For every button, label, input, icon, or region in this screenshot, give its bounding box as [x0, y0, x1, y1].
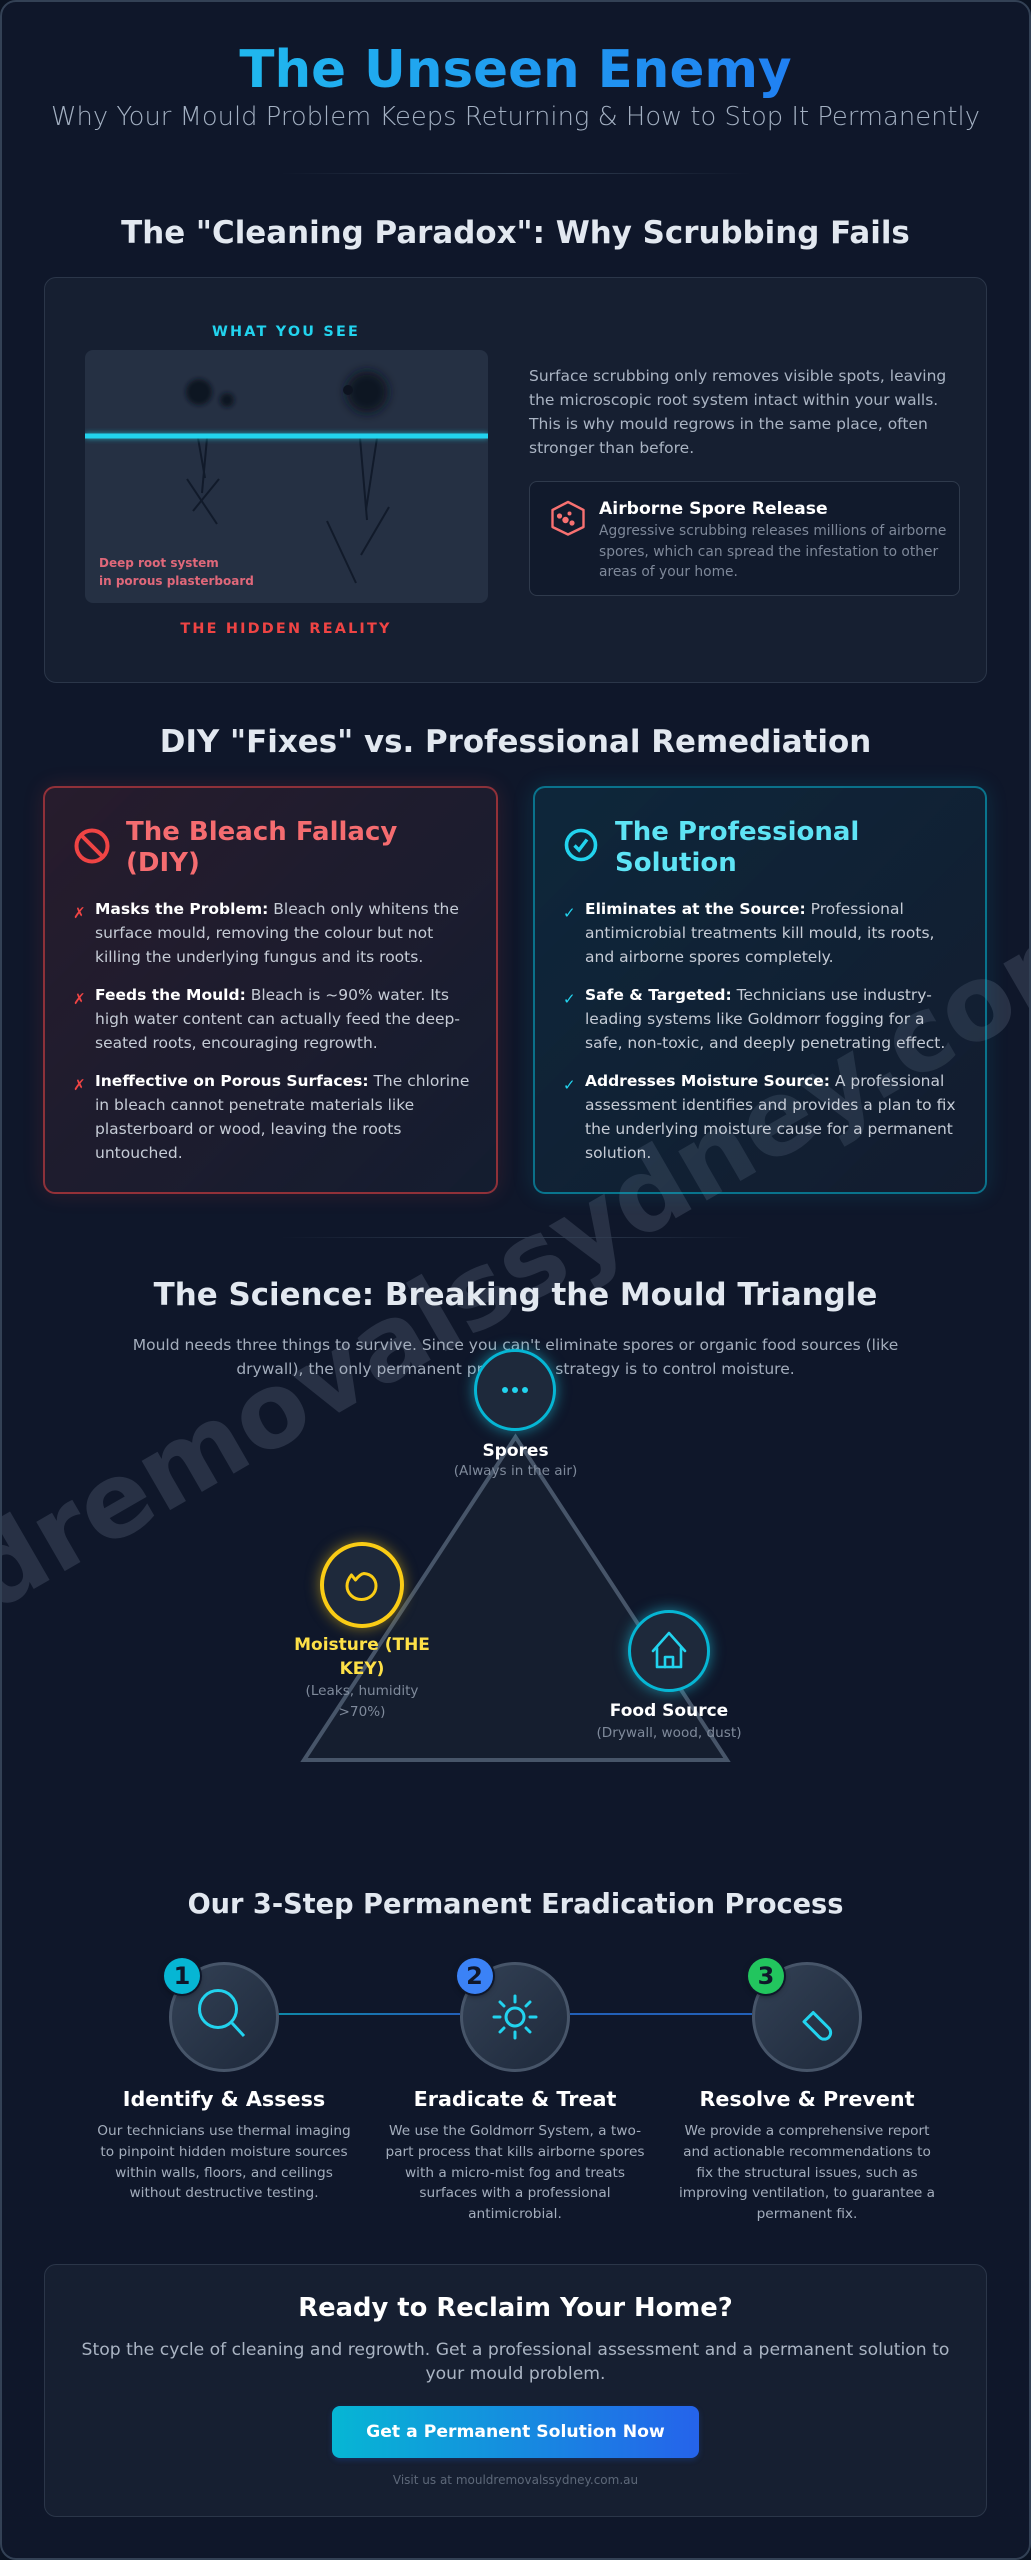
badge: [456, 1958, 492, 1994]
panel: bleach fallacy: [43, 786, 498, 1194]
diagram: mould triangle: [300, 1434, 730, 1762]
callout heading: Airborne Spore Release: [599, 499, 828, 519]
list item: surface mould, removing the colour but not: [95, 924, 433, 942]
node: food source: [596, 1601, 742, 1741]
step text: antimicrobial.: [468, 2206, 562, 2222]
step text: We use the Goldmorr System, a two-: [389, 2123, 641, 2139]
icon: spores hexagon: [551, 500, 585, 536]
step text: [97, 2123, 351, 2201]
marker: ✓: [563, 1076, 576, 1094]
marker: ✓: [563, 904, 576, 922]
triangle intro: [133, 1336, 898, 1378]
CTA button: Get a Permanent Solution Now: [366, 2422, 665, 2442]
marker: ✓: [563, 990, 576, 1008]
list item: high water content can actually feed the deep-: [95, 1010, 460, 1028]
icon: sun: [460, 1962, 570, 2072]
CTA text: your mould problem.: [426, 2364, 606, 2384]
badge: 2: [466, 1962, 483, 1990]
triangle intro: drywall), the only permanent prevention strategy is to control moisture.: [236, 1360, 795, 1378]
step text: Our technicians use thermal imaging: [97, 2123, 351, 2139]
step title: Identify & Assess: [123, 2087, 325, 2111]
panel: call to action: [44, 2264, 987, 2517]
list item: safe, non-toxic, and deeply penetrating effect.: [585, 1034, 945, 1052]
diagram caption: in porous plasterboard: [99, 574, 254, 588]
list item: the underlying moisture cause for a permanent: [585, 1120, 953, 1138]
subtitle: Why Your Mould Problem Keeps Returning & How to Stop It Permanently: [51, 102, 980, 132]
heading: 3-step process: Our 3-Step Permanent Eradication Process: [188, 1889, 843, 1920]
list item: solution.: [585, 1144, 651, 1162]
step text: improving ventilation, to guarantee a: [679, 2185, 935, 2201]
node label: Moisture (THE: [294, 1635, 430, 1655]
icon: check circle: [564, 828, 598, 862]
paradox explanation: [528, 367, 946, 457]
node: moisture: [294, 1533, 430, 1720]
badge: [748, 1958, 784, 1994]
panel: professional solution: [533, 786, 987, 1194]
step text: with a micro-mist fog and treats: [405, 2165, 625, 2181]
node detail: (Always in the air): [454, 1463, 577, 1479]
list item: [585, 900, 934, 966]
list item: Masks the Problem: Bleach only whitens the: [95, 900, 459, 918]
icon: moisture circle: [320, 1542, 404, 1628]
heading: cleaning paradox: The "Cleaning Paradox": Why Scrubbing Fails: [121, 215, 910, 251]
step title: Eradicate & Treat: [414, 2087, 616, 2111]
list item: [95, 1072, 469, 1162]
diagram caption: [99, 556, 254, 588]
CTA text: [82, 2340, 949, 2384]
list item: in bleach cannot penetrate materials like: [95, 1096, 414, 1114]
list item: leading systems like Goldmorr fogging for a: [585, 1010, 924, 1028]
list item: Feeds the Mould: Bleach is ~90% water. Its: [95, 986, 449, 1004]
CTA text: Stop the cycle of cleaning and regrowth. Get a professional assessment and a permanent solution to: [82, 2340, 949, 2360]
footer link: Visit us at mouldremovalssydney.com.au: [393, 2473, 638, 2487]
card heading: [126, 817, 397, 878]
callout text: Aggressive scrubbing releases millions of airborne: [599, 523, 946, 539]
paradox explanation: stronger than before.: [529, 439, 694, 457]
node detail: (Drywall, wood, dust): [596, 1725, 742, 1741]
icon: sealant: [752, 1962, 862, 2072]
step text: without destructive testing.: [129, 2185, 319, 2201]
list item: [585, 986, 945, 1052]
callout text: spores, which can spread the infestation to other: [599, 544, 938, 560]
node detail: [306, 1683, 418, 1720]
card heading: Solution: [615, 848, 737, 878]
step 3: [679, 1958, 935, 2222]
icon: food circle: [628, 1610, 710, 1692]
icon: magnifier: [169, 1962, 279, 2072]
step 2: [385, 1958, 645, 2222]
node label: KEY): [340, 1659, 384, 1679]
connector line: [570, 2013, 752, 2015]
list item: seated roots, encouraging regrowth.: [95, 1034, 378, 1052]
card heading: The Bleach Fallacy: [126, 817, 397, 847]
paradox explanation: This is why mould regrows in the same place, often: [529, 415, 928, 433]
list item: plasterboard or wood, leaving the roots: [95, 1120, 401, 1138]
list item: [95, 900, 459, 966]
diagram: wall cross-section: [85, 350, 488, 603]
callout text: [599, 523, 946, 580]
paradox explanation: the microscopic root system intact within your walls.: [529, 391, 938, 409]
step 1: [97, 1958, 351, 2201]
node label: [294, 1635, 430, 1679]
badge: [164, 1958, 200, 1994]
card heading: The Professional: [615, 817, 859, 847]
title: The Unseen Enemy: [239, 40, 792, 100]
heading: mould triangle: The Science: Breaking the Mould Triangle: [154, 1277, 877, 1313]
paradox explanation: Surface scrubbing only removes visible spots, leaving: [529, 367, 946, 385]
list item: Eliminates at the Source: Professional: [585, 900, 904, 918]
step text: within walls, floors, and ceilings: [115, 2165, 333, 2181]
icon: droplet: [346, 1572, 378, 1601]
step text: fix the structural issues, such as: [696, 2165, 918, 2181]
list item: Addresses Moisture Source: A professional: [585, 1072, 944, 1090]
node: spores: [454, 1340, 577, 1479]
CTA button: [332, 2406, 699, 2458]
node detail: (Leaks, humidity: [306, 1683, 418, 1699]
marker: ✗: [73, 904, 86, 922]
icon: spores circle: [474, 1349, 556, 1431]
list item: untouched.: [95, 1144, 183, 1162]
node label: Spores: [482, 1441, 549, 1461]
node label: Food Source: [610, 1701, 728, 1721]
step text: to pinpoint hidden moisture sources: [100, 2144, 348, 2160]
callout: airborne spore release: [529, 481, 960, 596]
step text: permanent fix.: [757, 2206, 857, 2222]
icon: prohibited: [74, 828, 110, 864]
marker: ✗: [73, 1076, 86, 1094]
list item: and airborne spores completely.: [585, 948, 834, 966]
list item: [585, 1072, 956, 1162]
step text: [679, 2123, 935, 2222]
step text: and actionable recommendations to: [683, 2144, 931, 2160]
card heading: [615, 817, 859, 878]
node detail: >70%): [339, 1704, 385, 1720]
panel: cleaning paradox: [44, 277, 987, 683]
badge: 1: [174, 1962, 190, 1990]
diagram caption: Deep root system: [99, 556, 219, 570]
CTA heading: Ready to Reclaim Your Home?: [298, 2293, 733, 2323]
list item: antimicrobial treatments kill mould, its roots,: [585, 924, 934, 942]
badge: 3: [758, 1962, 774, 1990]
connector line: [278, 2013, 460, 2015]
step text: part process that kills airborne spores: [385, 2144, 645, 2160]
step title: Resolve & Prevent: [699, 2087, 915, 2111]
label: what you see: WHAT YOU SEE: [212, 324, 360, 340]
list item: assessment identifies and provides a plan to fix: [585, 1096, 956, 1114]
heading: DIY vs professional: DIY "Fixes" vs. Professional Remediation: [160, 724, 871, 760]
list item: Safe & Targeted: Technicians use industry-: [585, 986, 932, 1004]
step text: surfaces with a professional: [419, 2185, 611, 2201]
triangle intro: Mould needs three things to survive. Since you can't eliminate spores or organic food sources (like: [133, 1336, 898, 1354]
marker: ✗: [73, 990, 86, 1008]
list item: killing the underlying fungus and its roots.: [95, 948, 423, 966]
step text: We provide a comprehensive report: [684, 2123, 930, 2139]
list item: Ineffective on Porous Surfaces: The chlorine: [95, 1072, 469, 1090]
label: hidden reality: THE HIDDEN REALITY: [180, 621, 392, 637]
callout text: areas of your home.: [599, 564, 738, 580]
card heading: (DIY): [126, 848, 200, 878]
step text: [385, 2123, 645, 2222]
list item: [95, 986, 460, 1052]
